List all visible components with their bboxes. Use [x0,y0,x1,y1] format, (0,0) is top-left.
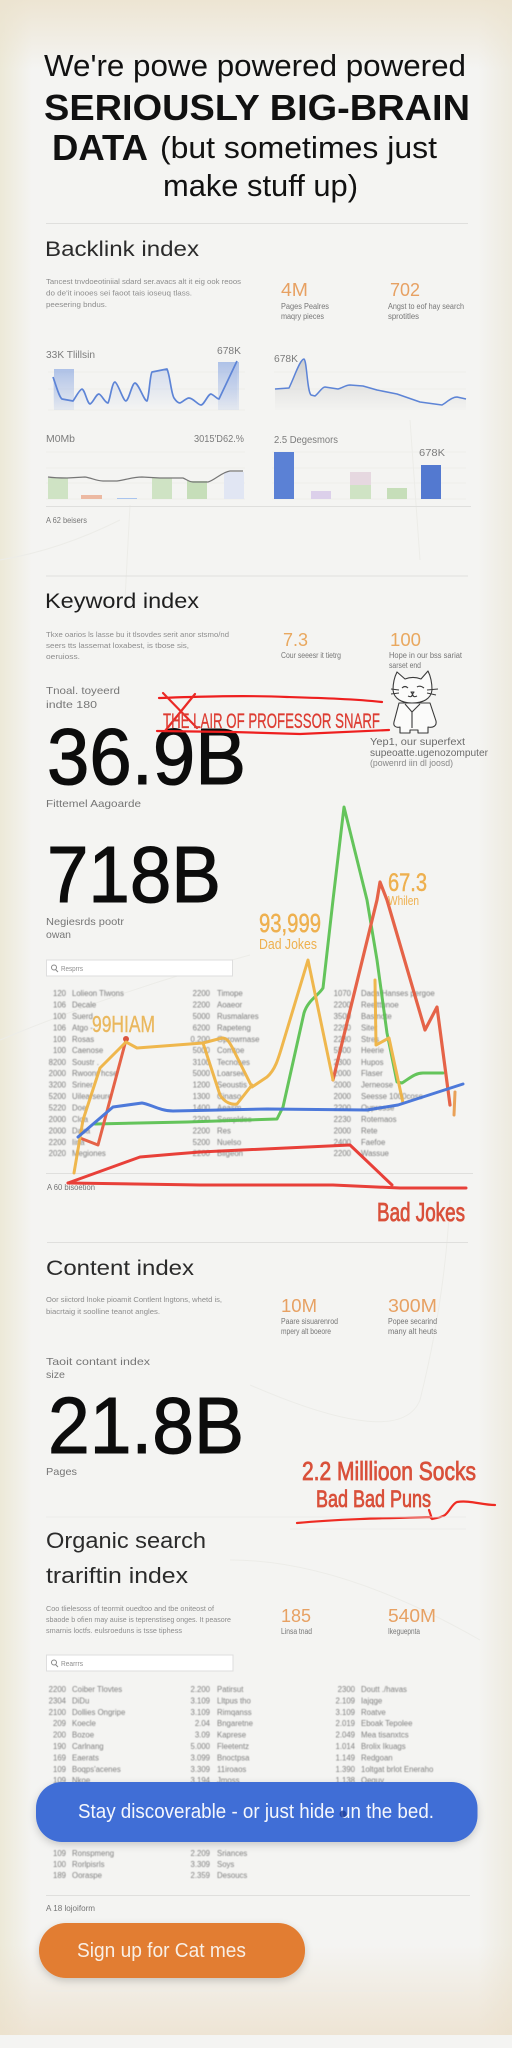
keyword table: 2000 [334,1080,352,1090]
keyword table: 100 [53,1035,67,1044]
keyword table: 2200 [49,1138,67,1147]
crayon line: lower red flat [68,1145,392,1185]
keyword footnote: A 60 bisoetion [47,1183,95,1192]
content stats: Popee secarind [388,1317,437,1326]
organic footnote: A 18 lojoiform [46,1904,95,1913]
keyword table [49,989,435,1158]
organic table: 3.09 [195,1730,210,1740]
crayon line: yellow loop [203,1043,252,1104]
crayon label: bad jokes: Bad Jokes [377,1197,465,1227]
keyword table: 2200 [193,1126,211,1136]
keyword table: 2020 [49,1149,67,1158]
keyword table: 5000 [193,1069,211,1078]
keyword table: 2200 [193,1000,211,1010]
search box: Resprrs [61,964,83,973]
keyword table: Sriner [72,1080,93,1090]
keyword table: 2200 [334,1024,352,1032]
chart: bars [272,435,466,499]
keyword table: Siter [361,1024,377,1032]
backlink description: do de'it inooes sei faoot tais ioseuq tlass. [46,288,192,298]
keyword description [46,630,229,661]
heading: organic search traffic index [46,1528,206,1588]
organic table: 2.019 [335,1719,355,1728]
keyword table: 100 [53,1046,67,1055]
keyword table: Flaser [361,1069,383,1078]
label under 36.9B: Fittemel Aagoarde [46,798,141,810]
keyword table: Rwoonr hcse [72,1069,118,1078]
label under 718B: Negiesrds pootr [46,916,125,928]
backlink stats: Angst to eof hay search [388,302,464,311]
keyword table: Uilearseure [72,1092,112,1101]
keyword table: Jerneose [361,1080,393,1090]
organic stats: 540M [388,1606,436,1626]
content stats: Paare sisuarenrod [281,1317,338,1326]
keyword table: Cinaso [217,1092,242,1101]
organic table: Lltpus tho [217,1696,251,1706]
organic table: 3.099 [190,1754,210,1762]
keyword table: 2000 [49,1069,67,1078]
keyword table: Comtoe [217,1046,244,1055]
keyword stats [281,630,463,670]
organic table: Eaerats [72,1754,99,1762]
total content label: size [46,1369,65,1381]
title: (but sometimes just [160,130,437,165]
panel: backlink index [45,238,471,525]
organic table: 1.014 [335,1742,356,1751]
crayon line: yellow dad jokes [74,960,333,1173]
keyword table: 100 [53,1012,67,1021]
title: We're powe powered powered [44,48,466,83]
keyword table: 2000 [334,1069,352,1078]
keyword table: 5000 [193,1012,211,1021]
keyword table: 0.200 [190,1035,211,1044]
big number 36.9B: 36.9B [47,712,246,801]
keyword table: 106 [53,1024,66,1032]
keyword table: Seoustis [217,1080,247,1090]
keyword table: Dada Hanses pergoe [361,989,435,998]
organic table: 169 [53,1754,66,1762]
keyword table: 1400 [193,1104,211,1112]
organic table: Sriances [217,1849,247,1858]
backlink stats [281,280,464,321]
crayon line chart [68,807,466,1188]
keyword table: Megiones [72,1149,106,1158]
title: SERIOUSLY BIG-BRAIN [44,87,470,128]
organic table: 2.359 [190,1871,210,1880]
keyword description: seers tts lassemat loxabest, is tbose sis, [46,641,189,650]
keyword table: Basmote [361,1012,392,1021]
keyword table: Soustr . [72,1058,99,1067]
organic table: 209 [53,1719,66,1728]
organic table: Mea tisanxtcs [361,1730,409,1740]
keyword table: 2000 [334,1126,352,1136]
search box: Rearrrs [61,1659,83,1668]
button: sign up [39,1923,305,1978]
organic table: 5.000 [190,1742,211,1751]
organic table: Nkoe [72,1776,90,1785]
content stats: 300M [388,1296,437,1316]
organic table: 2304 [49,1696,67,1706]
organic table: Boqps'acenes [72,1765,121,1774]
total keywords label: Tnoal. toyeerd [46,685,120,697]
search box [46,1655,233,1671]
organic stats: 185 [281,1606,311,1626]
keyword table: Doe [72,1104,86,1112]
keyword table: Loarsee [217,1069,245,1078]
organic table: 2.04 [195,1719,211,1728]
content description: biacrtaig it soolline teanot angles. [46,1307,160,1316]
keyword stats: Hope in our bss sariat [389,651,463,660]
backlink stats: maqry pieces [281,312,324,321]
keyword stats: sarset end [389,661,421,670]
organic table: Bngaretne [217,1719,253,1728]
keyword table: 2230 [334,1115,352,1124]
keyword table: Heerie [361,1046,384,1055]
keyword table: 5500 [334,1046,352,1055]
organic table: 109 [53,1849,66,1858]
total content label: Taoit contant index [46,1356,151,1368]
caption: superfast supercomputer: Yep1, our superfext [370,737,465,748]
content stats: mpery alt boeore [281,1327,331,1336]
organic table: 3.109 [335,1708,355,1717]
organic table: 1.149 [335,1754,355,1762]
keyword table: 1300 [193,1092,211,1101]
organic table: Patirsut [217,1685,244,1694]
heading: organic search traffic index: Organic search [46,1528,206,1553]
organic table: 3.309 [190,1860,210,1869]
organic table: Carlnang [72,1742,104,1751]
organic table: 2.109 [335,1696,355,1706]
crayon point: red early peak [123,1036,129,1042]
organic table: Doutt ./havas [361,1685,407,1694]
crayon line: red peak [333,882,450,1105]
heading: content index: Content index [46,1257,195,1280]
chart: grey area line: 678K [274,354,298,365]
panel: keyword index [45,590,473,1192]
keyword table: Faefoe [361,1138,385,1147]
crayon label: 93,999 dad jokes: Dad Jokes [259,936,317,953]
keyword table: 2400 [334,1138,352,1147]
keyword table: 5200 [49,1092,67,1101]
keyword stats: Cour seeesr it tietrg [281,651,341,660]
keyword table: Timope [217,989,243,998]
keyword table: 2200 [193,989,211,998]
keyword table: Decale [72,1000,96,1010]
organic table: 3.194 [190,1776,211,1785]
backlink description: Tancest tnvdoeotiniial sdard ser.avacs alt it eig ook reoos [46,277,241,286]
keyword table: Rosas [72,1035,94,1044]
organic table: 1.390 [335,1765,356,1774]
annotation: socks and puns: 2.2 Milllioon Socks [302,1456,476,1486]
keyword table: 2000 [334,1092,352,1101]
organic table: 109 [53,1765,66,1774]
chart: grey line over pale bars [46,434,245,499]
keyword table: 2000 [49,1126,67,1136]
backlink footnote: A 62 beisers [46,516,87,525]
keyword table: Caenose [72,1046,103,1055]
big number 21.8B: 21.8B [48,1381,244,1470]
organic table: Bozoe [72,1730,94,1740]
organic table: Dollies Ongripe [72,1708,125,1717]
keyword table: Nuelso [217,1138,242,1147]
organic table: Bnoctpsa [217,1754,250,1762]
banner: stay discoverable: Stay discoverable - or just hide un the bed. [78,1801,434,1823]
backlink description [46,277,241,309]
organic table: Soys [217,1860,234,1869]
caption: superfast supercomputer: (powenrd iin dl joosd) [370,758,453,768]
total keywords label: indte 180 [46,699,97,711]
organic table: Iajqge [361,1696,382,1706]
keyword table: 2300 [334,1058,352,1067]
organic table: 100 [53,1860,67,1869]
keyword description: oeruioss. [46,652,80,661]
organic table [49,1685,434,1880]
label under 718B [46,916,125,941]
keyword table: 5200 [193,1138,211,1147]
crayon line: yellow right [375,980,403,1103]
keyword table: Res [217,1126,231,1136]
organic table: Koecle [72,1719,96,1728]
search box [46,960,232,976]
keyword table: 3100 [193,1058,211,1067]
keyword table: 120 [53,989,67,998]
keyword table: 2280 [334,1035,352,1044]
organic stats [281,1606,436,1636]
big number 718B: 718B [47,830,221,919]
organic table: Coiber Tlovtes [72,1685,122,1694]
backlink description: peesering bndus. [46,300,107,309]
keyword table: Aeasm [217,1104,241,1112]
keyword table: Reeltthnoe [361,1000,399,1010]
keyword table: 5220 [49,1104,67,1112]
organic description: sbaode b ofien may auise is teprenstiseg onges. It peasore [46,1615,231,1624]
keyword table: 5000 [193,1046,211,1055]
organic table: 3.109 [190,1696,210,1706]
organic table: 109 [53,1776,66,1785]
backlink stats: 4M [281,280,308,300]
content stats: 10M [281,1296,317,1316]
keyword table: Wassue [361,1149,389,1158]
keyword table: Atgo - [72,1024,93,1032]
label: pages: Pages [46,1466,77,1478]
organic table: 2300 [338,1685,356,1694]
annotation: socks and puns: Bad Bad Puns [316,1486,431,1513]
keyword table: Dasa [72,1126,91,1136]
crayon label: 67.3: 67.3 [388,869,427,897]
keyword description: Tkxe oarios ls lasse bu it tlsovdes serit anor stsmo/nd [46,630,229,639]
organic table: Redgoan [361,1754,393,1762]
organic table: 1oltgat brlot Eneraho [361,1765,434,1774]
icon: cat in lab coat [391,671,438,733]
keyword table: 3200 [49,1080,67,1090]
crayon line: orange tail [454,1092,455,1115]
crayon label: 67.3: Whilen [388,893,419,908]
keyword table: Aoaeor [217,1000,243,1010]
organic table: Rimqanss [217,1708,252,1717]
content stats: many alt heuts [388,1327,437,1336]
keyword table: Tecnoses [217,1058,250,1067]
backlink stats: Pages Pealres [281,302,329,311]
keyword table: 2200 [334,1149,352,1158]
content description [46,1295,222,1316]
chart: grey line over pale bars: M0Mb [46,434,75,445]
keyword stats: 7.3 [283,630,308,650]
organic table: 3.109 [190,1708,210,1717]
title: DATA [52,127,148,168]
title [44,48,470,203]
organic table: Brolix Ikuags [361,1742,406,1751]
organic table: Roatve [361,1708,386,1717]
keyword table: 2000 [49,1115,67,1124]
crayon line: red early [80,1040,126,1145]
chart: spiky line with highlighted bars: 678K [217,346,241,357]
organic description [46,1604,231,1635]
keyword table: 1070 [334,989,352,998]
crayon label: 93,999 dad jokes: 93,999 [259,908,321,938]
caption: superfast supercomputer [370,737,489,768]
chart: grey line over pale bars: 3015'D62.% [194,434,244,445]
keyword table: Seesse 1000cose [361,1092,423,1101]
organic table: Desoucs [217,1871,247,1880]
organic table: Ooraspe [72,1871,102,1880]
panel: content index [46,1257,437,1478]
organic table: Kaprese [217,1730,246,1740]
organic table: 200 [53,1730,67,1740]
organic stats: Linsa tnad [281,1627,312,1636]
keyword table: 2200 [193,1115,211,1124]
keyword table: Suerd [72,1012,93,1021]
button: sign up: Sign up for Cat mes [77,1940,246,1962]
organic table: 2.200 [190,1685,211,1694]
keyword table: Lolieon Tlwons [72,989,124,998]
organic table: Fleetentz [217,1742,249,1751]
organic table: 2.049 [335,1730,355,1740]
crayon label: 99HIAM: 99HIAM [92,1011,155,1037]
organic description: Coo tlielesoss of teormit ouedtoo and tbe oniteost of [46,1604,215,1613]
organic table: Jmoss [217,1776,240,1785]
heading: keyword index: Keyword index [45,590,200,613]
keyword table: Rapeteng [217,1024,251,1032]
organic table: 190 [53,1742,67,1751]
chart: spiky line with highlighted bars: 33K Tlillsin [46,350,95,361]
organic table: 2100 [49,1708,67,1717]
organic table: 11iroaos [217,1765,246,1774]
title: make stuff up) [163,168,358,203]
backlink stats: 702 [390,280,420,300]
organic table: Ronspmeng [72,1849,114,1858]
keyword table: Bligeon [217,1149,243,1158]
keyword table: 2200 [334,1104,352,1112]
organic table: 3.309 [190,1765,210,1774]
organic table: DiDu [72,1696,89,1706]
keyword table: 6200 [193,1024,211,1032]
keyword table: Iina [72,1138,85,1147]
organic table: Oeguy [361,1776,384,1785]
keyword table: 2200 [193,1149,211,1158]
keyword table: Sempldes [217,1115,252,1124]
organic table: Eboak Tepolee [361,1719,412,1728]
annotation: the lair of professor snarf [157,693,389,734]
organic stats: Ikeguepnta [388,1627,420,1636]
annotation: socks and puns [297,1456,495,1523]
label under 718B: owan [46,929,71,941]
organic table: 1.138 [335,1776,355,1785]
keyword table: Oyprosse [361,1104,394,1112]
caption: superfast supercomputer: supeoatte.ugenozomputer [370,748,489,759]
backlink stats: sprotitles [388,312,419,321]
total keywords label [46,685,120,711]
organic description: smarnis loctfs. eulsroeduns is tsse tiphess [46,1626,182,1635]
content description: Oor siictord lnoke pioamit Contlent lngtons, whetd is, [46,1295,222,1304]
keyword table: 8200 [49,1058,67,1067]
keyword table: Cloa [72,1115,89,1124]
banner: stay discoverable [36,1782,478,1842]
content stats [281,1296,437,1336]
chart: spiky line with highlighted bars [46,346,245,410]
keyword table: Stres [361,1035,379,1044]
keyword table: 3500 [334,1012,352,1021]
chart: grey area line [274,354,466,410]
organic table: Rorlpisrls [72,1860,105,1869]
organic table: 2200 [49,1685,67,1694]
chart: bars: 678K [419,448,445,459]
crayon label: 67.3 [388,869,427,908]
heading: backlink index: Backlink index [45,238,200,261]
keyword table: 2200 [334,1000,352,1010]
chart: bars: 2.5 Degesmors [274,435,338,446]
crayon label: 93,999 dad jokes [259,908,321,953]
organic table: 2.209 [190,1849,210,1858]
organic table: 189 [53,1871,66,1880]
keyword table: 1200 [193,1080,211,1090]
keyword table: Gprowrnase [217,1035,259,1044]
keyword table: Rotemaos [361,1115,397,1124]
heading: organic search traffic index: trariftin index [46,1563,188,1588]
crayon line: green peak [95,807,443,1124]
keyword table: Rusmalares [217,1012,259,1021]
keyword table: Rete [361,1126,377,1136]
crayon line: bottom red [68,1183,466,1188]
keyword stats: 100 [390,630,421,650]
keyword table: 106 [53,1000,66,1010]
keyword table: Hupos [361,1058,384,1067]
total content label [46,1356,151,1381]
crayon line: blue [78,1084,463,1137]
panel: organic search traffic index [46,1528,470,1913]
annotation: the lair of professor snarf: THE LAIR OF PROFESSOR SNARF [163,710,380,733]
